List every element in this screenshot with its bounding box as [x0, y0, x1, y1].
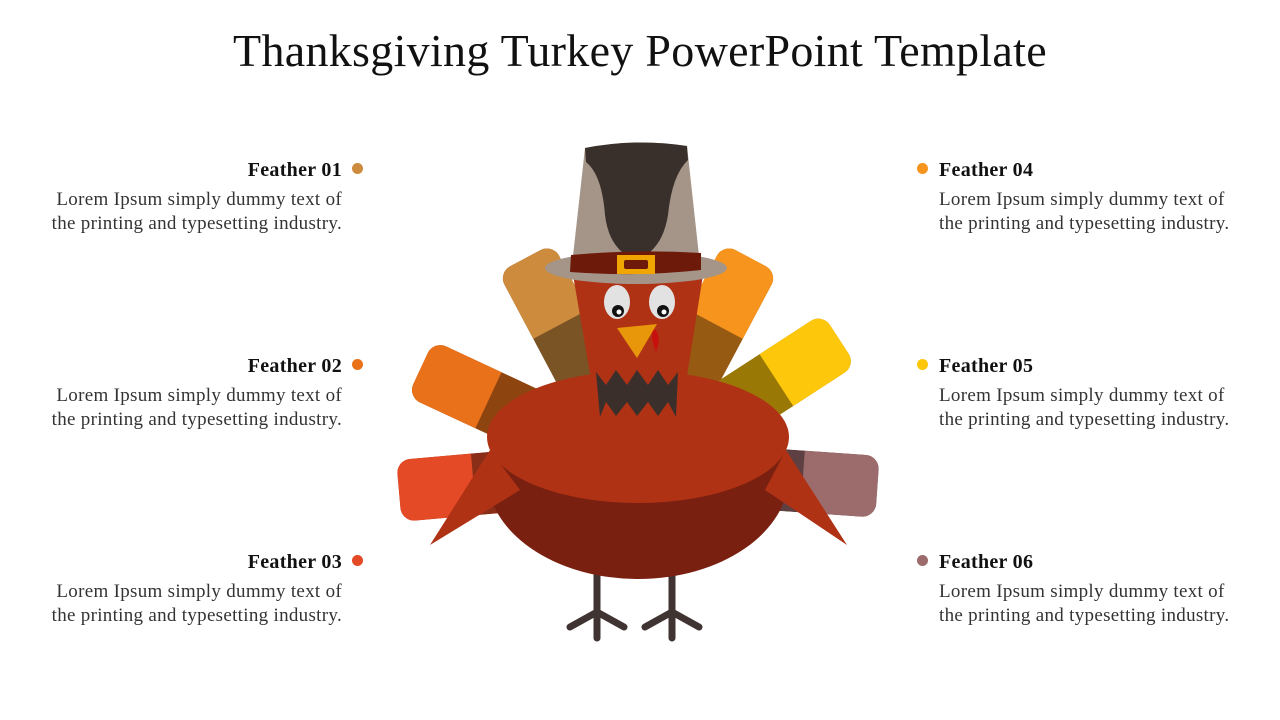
dot 06 [917, 555, 928, 566]
item: feather 06: Feather 06 [939, 551, 1033, 573]
title: Thanksgiving Turkey PowerPoint Template [233, 25, 1047, 76]
body [430, 371, 847, 579]
hat [545, 142, 727, 284]
legs [570, 575, 699, 638]
item: feather 03: the printing and typesetting industry. [52, 605, 342, 626]
dot 02 [352, 359, 363, 370]
item: feather 04 [939, 159, 1229, 234]
item: feather 02 [52, 355, 342, 430]
item: feather 04: Feather 04 [939, 159, 1033, 181]
item: feather 01: the printing and typesetting industry. [52, 213, 342, 234]
item: feather 05: Feather 05 [939, 355, 1033, 377]
item: feather 04: the printing and typesetting industry. [939, 213, 1229, 234]
item: feather 03: Lorem Ipsum simply dummy text of [56, 581, 342, 602]
item: feather 05 [939, 355, 1229, 430]
dot 04 [917, 163, 928, 174]
item: feather 03 [52, 551, 342, 626]
item: feather 03: Feather 03 [248, 551, 342, 573]
item: feather 02: Lorem Ipsum simply dummy text of [56, 385, 342, 406]
dot 03 [352, 555, 363, 566]
item: feather 01 [52, 159, 342, 234]
turkey illustration [397, 142, 879, 642]
item: feather 01: Feather 01 [248, 159, 342, 181]
item: feather 02: the printing and typesetting industry. [52, 409, 342, 430]
item: feather 01: Lorem Ipsum simply dummy text of [56, 189, 342, 210]
item: feather 06: Lorem Ipsum simply dummy text of [939, 581, 1225, 602]
item: feather 06: the printing and typesetting industry. [939, 605, 1229, 626]
head and neck [573, 275, 703, 420]
item: feather 04: Lorem Ipsum simply dummy text of [939, 189, 1225, 210]
feathers [391, 239, 885, 522]
item: feather 02: Feather 02 [248, 355, 342, 377]
dot 05 [917, 359, 928, 370]
item: feather 05: Lorem Ipsum simply dummy text of [939, 385, 1225, 406]
item: feather 06 [939, 551, 1229, 626]
item: feather 05: the printing and typesetting industry. [939, 409, 1229, 430]
dot 01 [352, 163, 363, 174]
